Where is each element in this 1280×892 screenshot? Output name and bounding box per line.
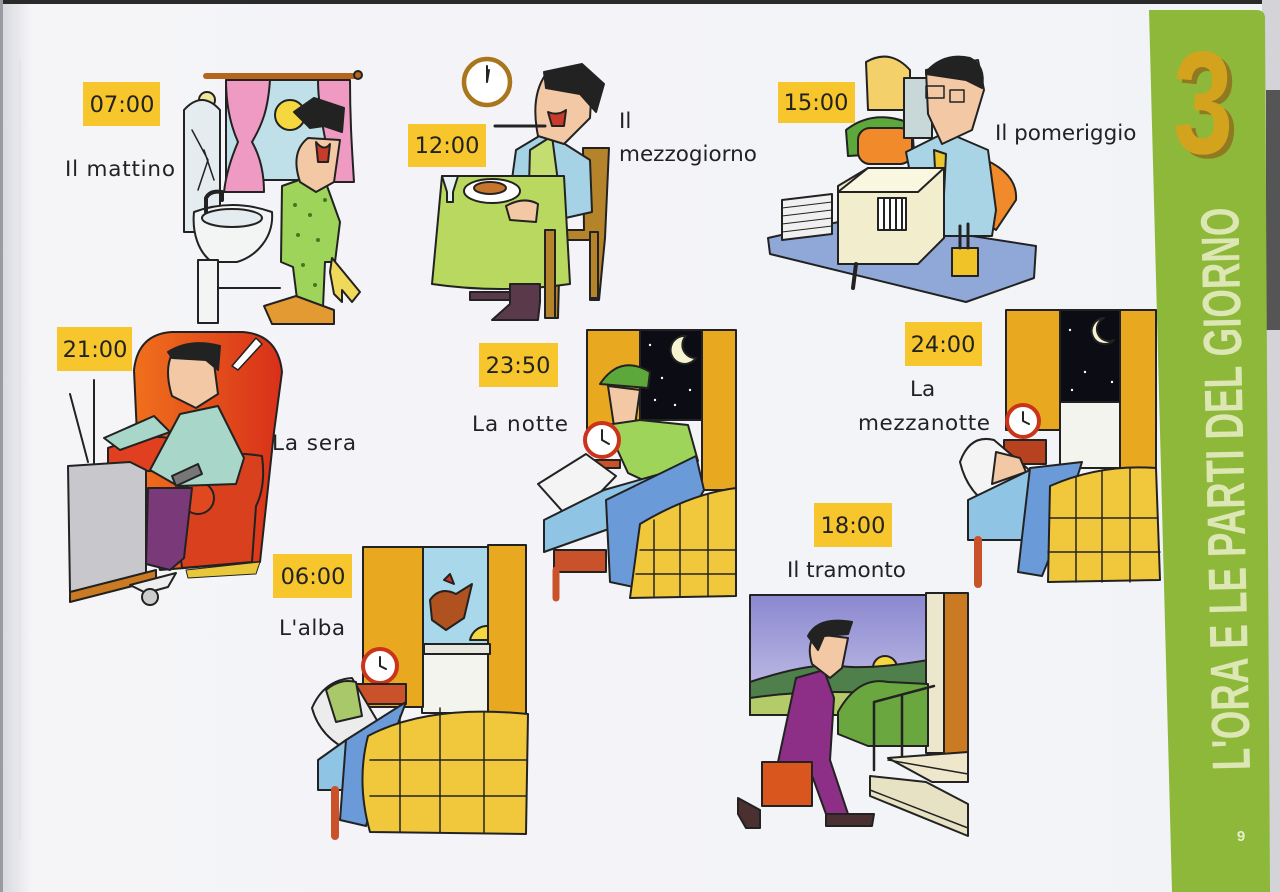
- scene: dawn 06:00: L'alba: [279, 616, 345, 641]
- scene: noon 12:00: [408, 59, 757, 320]
- scene: midnight 24:00: 24:00: [911, 332, 975, 358]
- page number: 9: [1237, 828, 1245, 845]
- scene: night 23:50: [472, 330, 736, 598]
- icon: pencil cursor: [232, 338, 262, 370]
- scene: night 23:50: La notte: [472, 412, 568, 437]
- scene: midnight 24:00: mezzanotte: [858, 411, 990, 436]
- scene: noon 12:00: Il: [619, 109, 631, 134]
- scene: midnight 24:00: La: [910, 377, 935, 402]
- scene: morning 07:00: Il mattino: [65, 157, 175, 182]
- chapter number 3: 3: [1178, 25, 1238, 188]
- green side band: [1149, 10, 1270, 892]
- scene: noon 12:00: mezzogiorno: [619, 142, 757, 167]
- scene: dawn 06:00: [273, 545, 528, 836]
- scene: evening 21:00: La sera: [272, 431, 356, 456]
- chapter number 3: 3: [1173, 21, 1233, 184]
- scene: sunset 18:00: [738, 503, 968, 836]
- scene: afternoon 15:00: Il pomeriggio: [995, 121, 1136, 146]
- scene: afternoon 15:00: 15:00: [784, 90, 848, 116]
- scene: night 23:50: 23:50: [486, 353, 550, 379]
- scene: sunset 18:00: Il tramonto: [787, 558, 906, 583]
- icon: wall clock: [464, 59, 510, 105]
- scene: midnight 24:00: [858, 310, 1160, 584]
- scene: dawn 06:00: 06:00: [281, 564, 345, 590]
- scene: morning 07:00: [65, 71, 362, 324]
- scene: afternoon 15:00: [768, 57, 1136, 302]
- scene: noon 12:00: 12:00: [415, 133, 479, 159]
- scene: evening 21:00: 21:00: [63, 337, 127, 363]
- scene: evening 21:00: [57, 327, 356, 605]
- scene: sunset 18:00: 18:00: [821, 513, 885, 539]
- scene: morning 07:00: 07:00: [90, 92, 154, 118]
